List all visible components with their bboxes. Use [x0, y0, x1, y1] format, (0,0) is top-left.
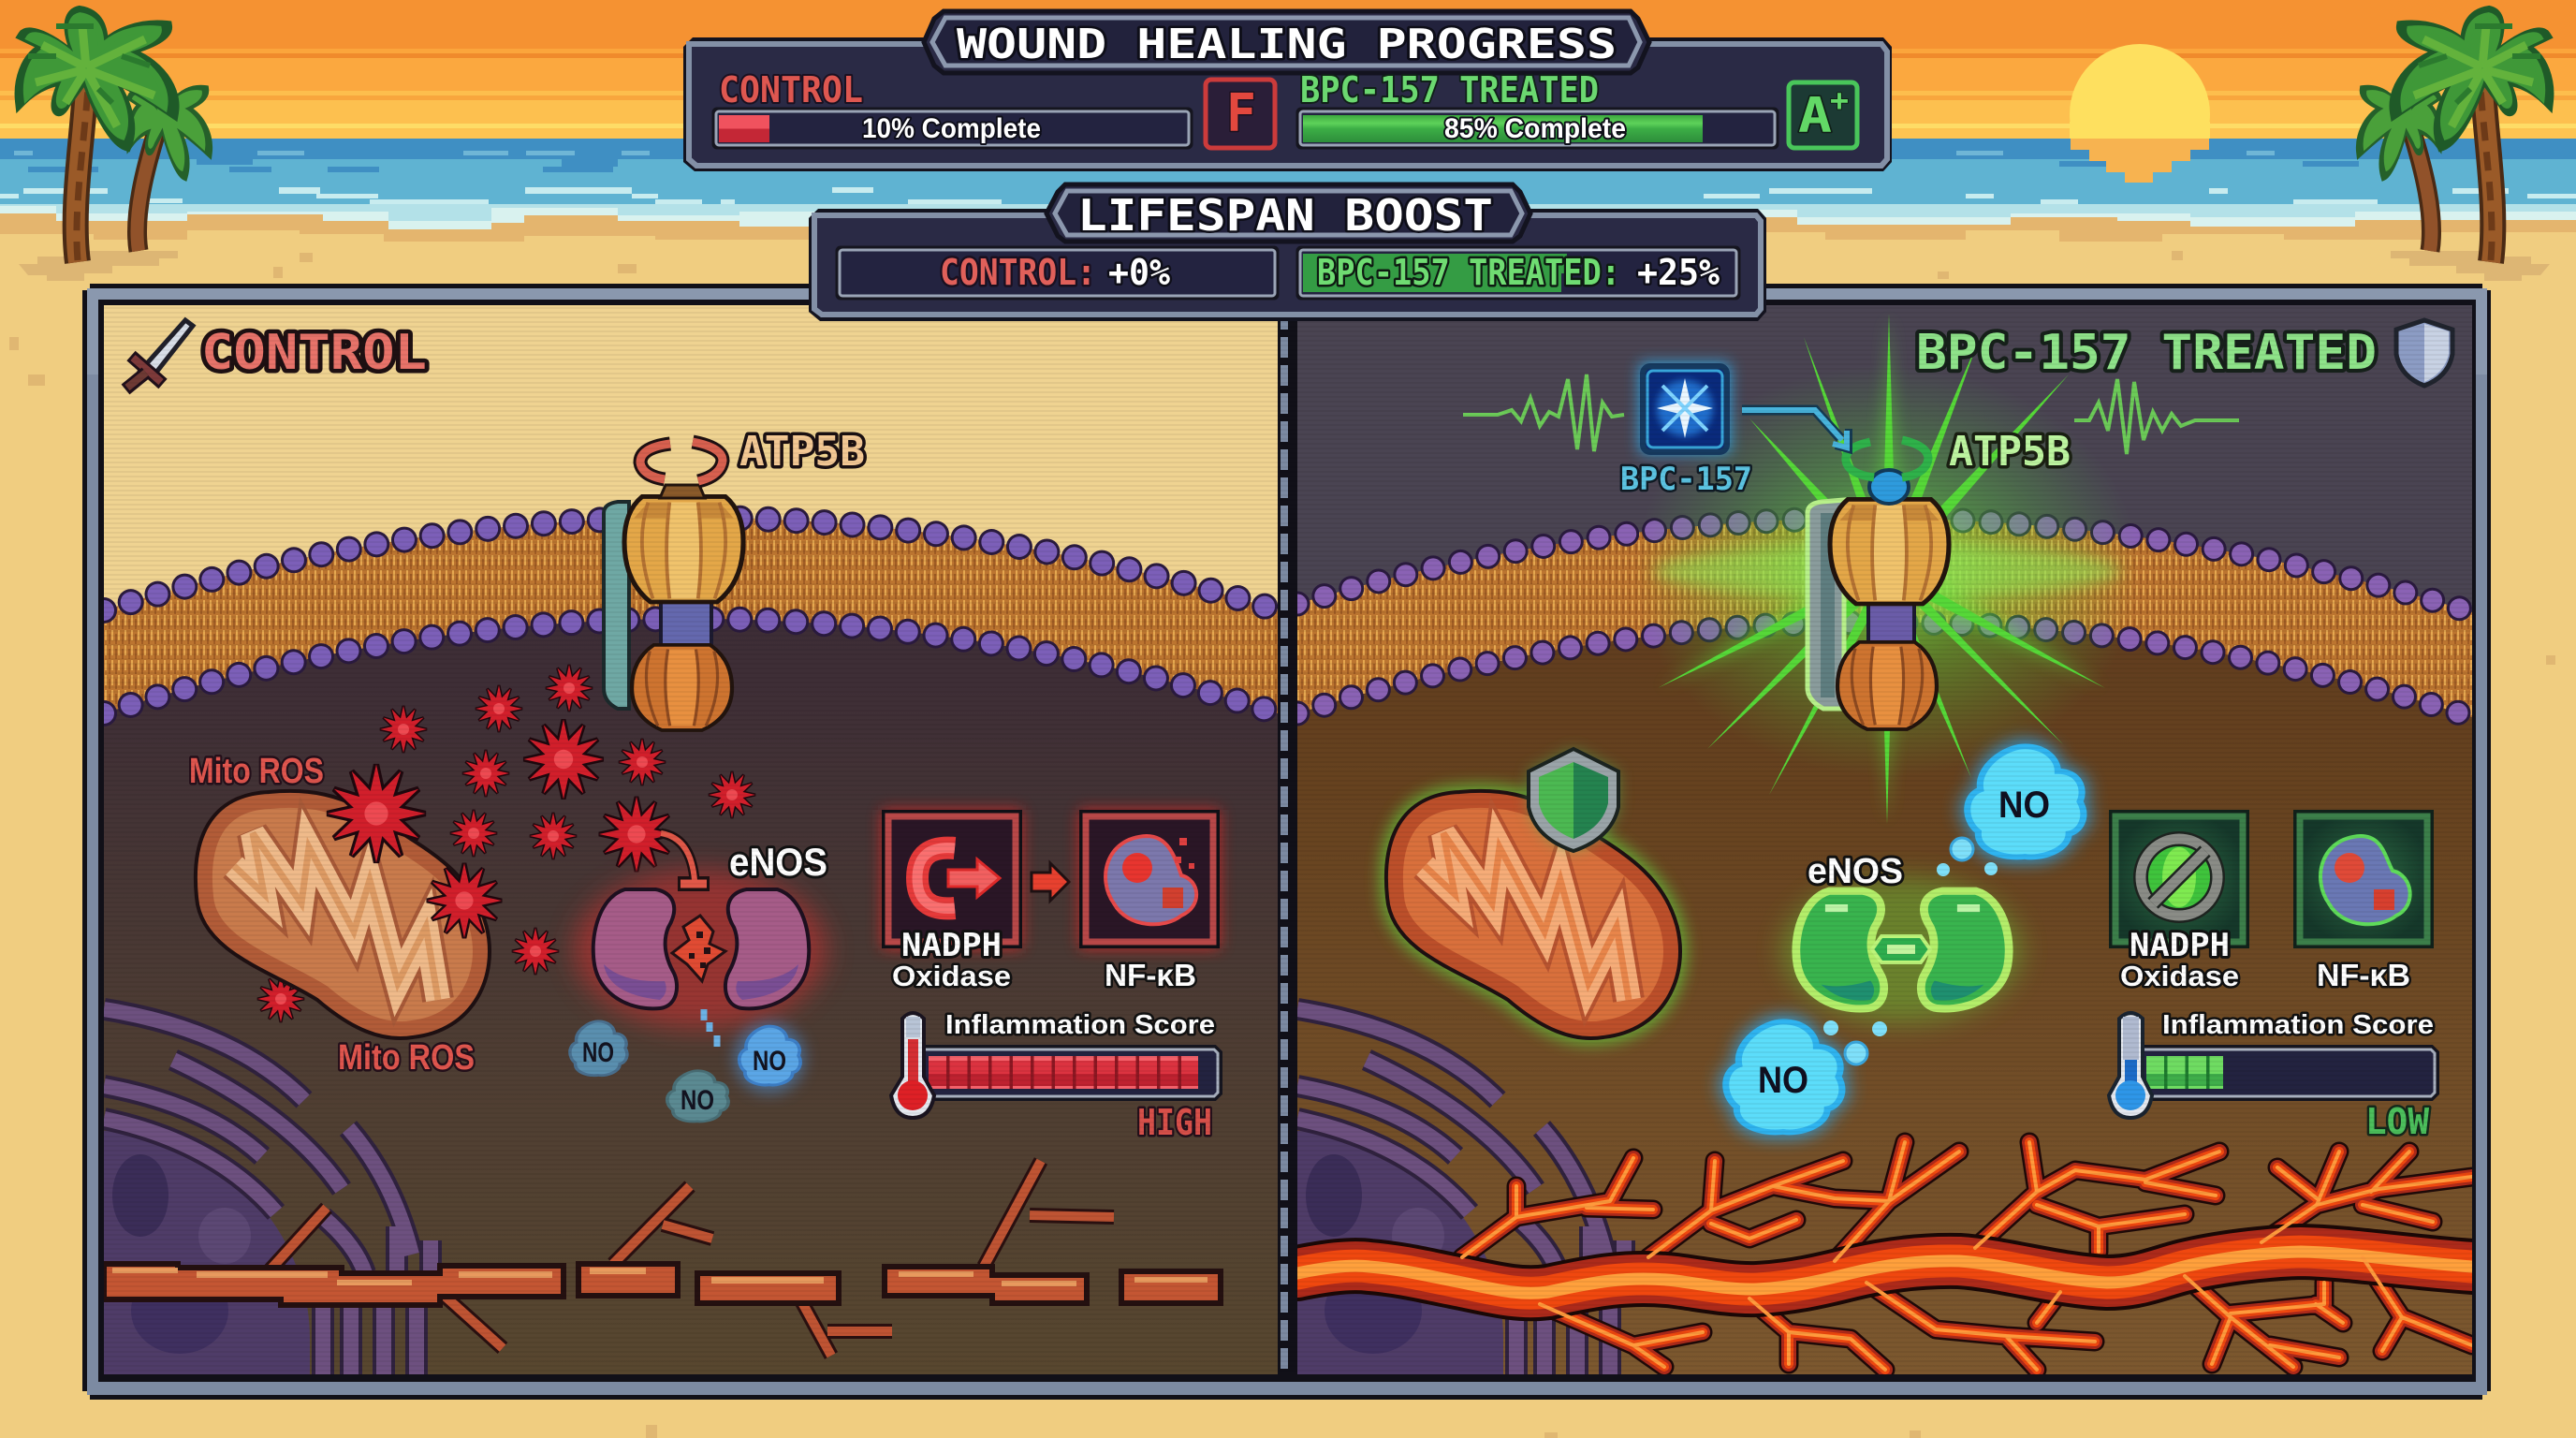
- energy wave right: [2074, 379, 2239, 454]
- eNOS broken control: [574, 870, 827, 1029]
- control progress bar: [714, 110, 1191, 147]
- wound healing progress banner: [683, 11, 1892, 171]
- ATP5B label control: ATP5B: [739, 428, 865, 476]
- NADPH oxidase icon treated: [2111, 812, 2247, 946]
- ROS radicals: [257, 665, 755, 1022]
- control progress bar: 10% Complete: [862, 113, 1041, 144]
- Oxidase label control: Oxidase: [892, 960, 1011, 992]
- arrow NADPH to NF-kB: [1032, 863, 1069, 901]
- grade A+: A: [1798, 88, 1832, 144]
- banner body: [683, 37, 1892, 171]
- panel: BPC-157 treated: [1297, 305, 2472, 1374]
- rotation arrows control: [640, 442, 723, 481]
- grade A+: [1789, 82, 1857, 148]
- lifespan fill: [814, 215, 1761, 315]
- banner tab border: [932, 18, 1640, 66]
- LOW label: LOW: [2365, 1101, 2429, 1142]
- NO molecules control: NO: [582, 1037, 614, 1068]
- NF-kB icon treated: [2295, 812, 2432, 946]
- grade A+: +: [1830, 82, 1849, 118]
- eNOS label control: eNOS: [729, 840, 827, 884]
- healthy blood vessel network: [1297, 1142, 2472, 1370]
- NF-kB icon control: [1079, 810, 1220, 948]
- ATP5B label treated: ATP5B: [1949, 428, 2071, 476]
- NF-kB label treated: NF-κB: [2317, 958, 2410, 992]
- ROS on mitochondrion: [328, 764, 502, 938]
- icon: shield: [2396, 320, 2452, 386]
- nucleus and endoplasmic reticulum: [104, 1009, 431, 1374]
- treated upper background: [1297, 305, 2472, 612]
- NO molecules control: NO: [753, 1046, 786, 1077]
- eNOS healthy: [1782, 877, 2022, 1023]
- panel: control: [104, 305, 1278, 1374]
- NADPH label control: NADPH: [901, 927, 1002, 964]
- control label: CONTROL: [719, 69, 863, 110]
- grade F: [1206, 80, 1275, 148]
- inhibition arrow: [661, 833, 710, 884]
- energy wave left: [1463, 374, 1624, 451]
- palm trees right: [2360, 11, 2548, 262]
- banner title: WOUND HEALING PROGRESS: [957, 21, 1617, 68]
- treated lifespan box: +25%: [1637, 252, 1720, 293]
- NADPH label treated: NADPH: [2130, 927, 2230, 964]
- NO cloud top: [1937, 740, 2089, 876]
- treated lifespan box: BPC-157 TREATED:: [1317, 252, 1620, 293]
- NO cloud bottom: [1720, 1015, 1887, 1138]
- arrow BPC to ATP5B: [1742, 410, 1849, 449]
- control title: CONTROL: [201, 325, 427, 381]
- centre divider: [1278, 305, 1297, 1374]
- palm trees left: [21, 11, 209, 262]
- treated label: BPC-157 TREATED: [1300, 69, 1599, 110]
- treated progress bar: [1298, 110, 1777, 147]
- NO molecules control: NO: [681, 1085, 714, 1116]
- inflammation score control: [891, 1010, 1221, 1118]
- NADPH oxidase icon control: [882, 810, 1022, 948]
- treated title: BPC-157 TREATED: [1916, 325, 2377, 381]
- lifespan title: LIFESPAN BOOST: [1077, 190, 1493, 241]
- treated membrane: [1297, 519, 2472, 717]
- control lifespan box: +0%: [1108, 252, 1170, 293]
- HIGH label: HIGH: [1137, 1102, 1212, 1143]
- lifespan tab border: [1055, 191, 1522, 235]
- control lifespan box: CONTROL:: [940, 252, 1096, 293]
- Mito ROS label bottom: Mito ROS: [338, 1038, 475, 1078]
- NF-kB label control: NF-κB: [1105, 958, 1196, 992]
- inflammation score control: Inflammation Score: [945, 1010, 1215, 1040]
- grade F: F: [1226, 83, 1256, 144]
- treated progress bar: 85% Complete: [1444, 113, 1626, 144]
- control upper background: [104, 305, 1278, 610]
- lifespan title tab: [1046, 184, 1530, 242]
- treated lifespan box: [1298, 248, 1738, 298]
- sun: [2070, 44, 2210, 184]
- green energy burst: [1634, 314, 2140, 824]
- control membrane: [104, 518, 1278, 713]
- NO molecules control: [570, 1009, 805, 1122]
- Oxidase label treated: Oxidase: [2120, 960, 2239, 992]
- banner fill: [689, 44, 1887, 166]
- Mito ROS label top: Mito ROS: [189, 752, 324, 791]
- BPC-157 label: BPC-157: [1620, 461, 1752, 498]
- background: sunset sky: [0, 0, 2576, 139]
- lifespan body: [809, 209, 1766, 321]
- background: sea: [0, 139, 2576, 218]
- mitochondrion control: [205, 800, 480, 1029]
- ATP synthase control: [604, 485, 743, 730]
- scanline overlay: [104, 305, 2472, 1374]
- NO cloud top: NO: [1998, 785, 2050, 826]
- mitochondrion treated: [1396, 800, 1671, 1029]
- rotation arrows treated: [1846, 440, 1928, 477]
- banner title tab: [924, 11, 1649, 73]
- nucleus and endoplasmic reticulum treated: [1297, 1009, 1624, 1374]
- icon: sword: [125, 320, 193, 389]
- control lifespan box: [838, 248, 1277, 298]
- lifespan boost banner: [809, 184, 1766, 321]
- main comparison panel frame: [82, 284, 2491, 1400]
- BPC-157 icon: [1640, 363, 1730, 453]
- bound BPC-157 peptide: [1869, 470, 1909, 504]
- ATP synthase treated: [1808, 499, 1949, 729]
- inflammation score treated: Inflammation Score: [2162, 1010, 2434, 1040]
- NO cloud bottom: NO: [1758, 1060, 1808, 1101]
- inflammation score treated: [2109, 1010, 2437, 1118]
- eNOS label treated: eNOS: [1808, 852, 1903, 891]
- shield on mitochondrion: [1529, 749, 1618, 851]
- fragmented blood vessel: [104, 1161, 1221, 1356]
